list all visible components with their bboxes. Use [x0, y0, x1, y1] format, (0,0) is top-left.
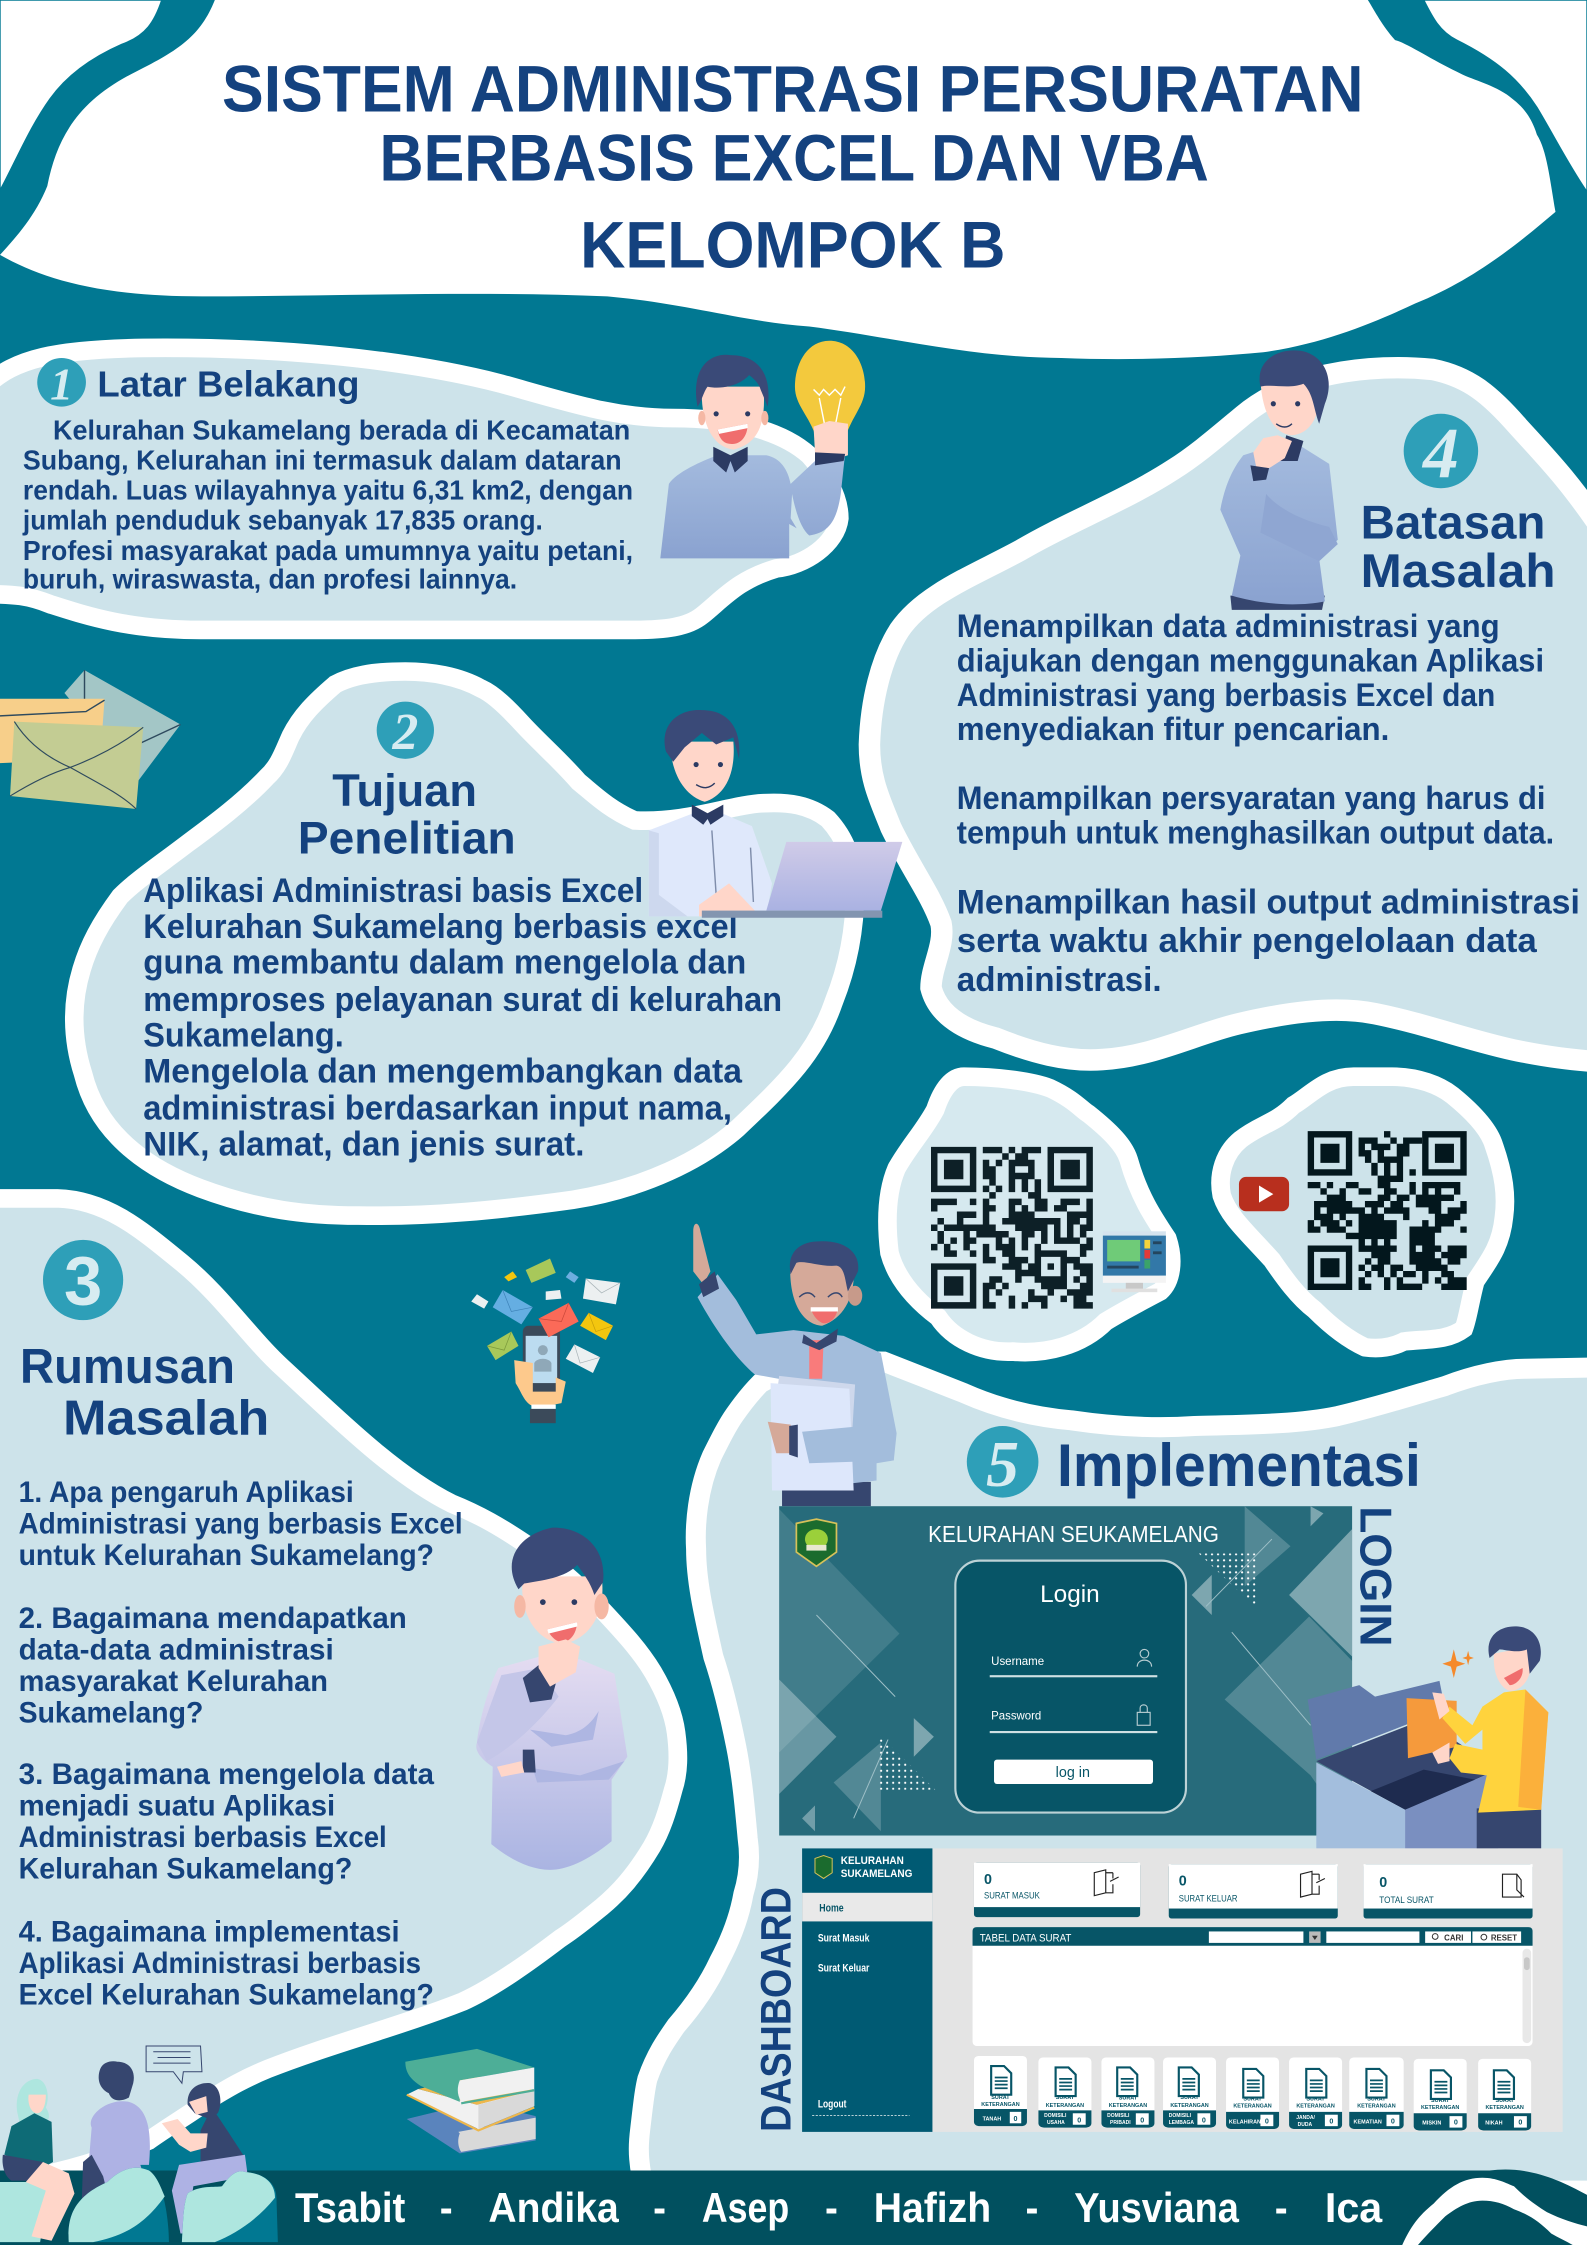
letter card: miskin: [1414, 2059, 1467, 2130]
body text: buruh, wiraswasta, dan profesi lainnya.: [23, 563, 517, 594]
sidebar: Surat Keluar: [818, 1963, 870, 1975]
body text: rendah. Luas wilayahnya yaitu 6,31 km2, dengan: [23, 475, 633, 506]
body text: Sukamelang.: [143, 1017, 344, 1055]
body text: guna membantu dalam mengelola dan: [143, 944, 746, 982]
body text: Subang, Kelurahan ini termasuk dalam dataran: [23, 445, 622, 476]
team names: Hafizh: [874, 2184, 991, 2231]
illustration: man with raised hand and papers: [693, 1224, 897, 1506]
table panel: CARI: [1444, 1934, 1463, 1943]
curly person: [82, 2061, 150, 2205]
login button: log in: [1056, 1765, 1090, 1781]
stat card: surat keluar: SURAT KELUAR: [1179, 1893, 1238, 1903]
team names: -: [653, 2184, 666, 2231]
footer bar: [0, 2169, 1587, 2245]
letter card: nikah: SURAT: [1495, 2098, 1514, 2104]
letter card: nikah: KETERANGAN: [1485, 2105, 1524, 2111]
letter card: janda duda: SURAT: [1306, 2096, 1325, 2102]
panel: batasan masalah: [869, 368, 1587, 1062]
icon: user: [1137, 1649, 1152, 1667]
body text: [143, 872, 782, 1163]
question list: 2. Bagaimana mendapatkan: [19, 1602, 407, 1635]
woman with green hair: [3, 2079, 74, 2241]
question list: 3. Bagaimana mengelola data: [19, 1758, 434, 1791]
letter card: domisili usaha: 0: [1077, 2117, 1081, 2125]
body text: Menampilkan persyaratan yang harus di: [957, 780, 1545, 816]
illustration: thinking man with open mouth: [476, 1528, 627, 1870]
number badge 3: 3: [64, 1242, 102, 1319]
letter card: domisili pribadi: KETERANGAN: [1109, 2103, 1147, 2109]
letter card: tanah: SURAT: [991, 2095, 1010, 2101]
panel: qr website: [887, 1077, 1171, 1352]
decoration: top left corner: [0, 0, 162, 190]
illustration: books: [405, 2049, 536, 2153]
number badge 3: [43, 1240, 123, 1320]
login site title: KELURAHAN SEUKAMELANG: [928, 1521, 1219, 1547]
team names: Tsabit: [295, 2184, 405, 2231]
letter card: kelahiran: 0: [1265, 2117, 1269, 2125]
number badge 5: [967, 1426, 1038, 1501]
seat right: [182, 2171, 278, 2242]
illustration: man with light bulb: [660, 341, 865, 558]
login button: [994, 1760, 1153, 1784]
sidebar: KELURAHAN: [841, 1855, 904, 1867]
letter card: tanah: TANAH: [983, 2116, 1001, 2122]
question list: [19, 1476, 463, 2011]
number badge 2: 2: [391, 704, 418, 761]
body text: Profesi masyarakat pada umumnya yaitu petani,: [23, 535, 633, 566]
table panel: [973, 1927, 1533, 2046]
team names: Andika: [488, 2184, 620, 2231]
vertical label: login: LOGIN: [1351, 1506, 1400, 1647]
title: [222, 52, 1364, 282]
letter card: tanah: [974, 2056, 1027, 2126]
letter card: domisili pribadi: [1101, 2057, 1154, 2128]
letter card: janda duda: KETERANGAN: [1296, 2104, 1335, 2110]
body text: jumlah penduduk sebanyak 17,835 orang.: [22, 505, 543, 536]
body text: serta waktu akhir pengelolaan data: [957, 922, 1538, 960]
qr code: [931, 1147, 1093, 1309]
illustration: thinking man: [1220, 350, 1338, 610]
letter card: miskin: MISKIN: [1422, 2121, 1441, 2127]
body text: [22, 415, 633, 594]
letter card: domisili usaha: KETERANGAN: [1046, 2103, 1084, 2109]
title: SISTEM ADMINISTRASI PERSURATAN: [222, 52, 1364, 126]
stat card: surat masuk: [974, 1863, 1140, 1917]
team names: Asep: [702, 2184, 789, 2231]
team names: -: [1026, 2184, 1038, 2231]
stat card: total surat: 0: [1379, 1875, 1387, 1891]
letter card: domisili lembaga: KETERANGAN: [1170, 2103, 1209, 2109]
body text: Administrasi yang berbasis Excel dan: [957, 677, 1495, 713]
stat card: surat keluar: [1169, 1864, 1338, 1919]
letter card: kelahiran: KELAHIRAN: [1229, 2119, 1261, 2125]
letter card: kelahiran: KETERANGAN: [1233, 2104, 1272, 2110]
sidebar: Logout: [818, 2099, 847, 2111]
number badge 4: 4: [1421, 414, 1459, 493]
letter card: tanah: KETERANGAN: [981, 2102, 1020, 2108]
number badge 4: [1404, 414, 1478, 493]
question list: Administrasi berbasis Excel: [19, 1821, 387, 1854]
woman talking: [162, 2083, 248, 2234]
body text: Kelurahan Sukamelang berbasis excel: [143, 908, 738, 946]
letter card: domisili pribadi: SURAT: [1119, 2096, 1138, 2102]
title banner: [0, 0, 1555, 359]
letter card: domisili lembaga: SURAT: [1180, 2095, 1199, 2101]
letter card: domisili pribadi: PRIBADI: [1110, 2120, 1131, 2126]
heading: [20, 1340, 269, 1446]
letter card: janda duda: JANDA/: [1296, 2115, 1315, 2121]
stat card: surat masuk: SURAT MASUK: [984, 1891, 1041, 1901]
sidebar: SUKAMELANG: [841, 1868, 912, 1880]
letter card: domisili pribadi: 0: [1140, 2117, 1144, 2125]
number badge 5: 5: [986, 1428, 1019, 1501]
body text: NIK, alamat, dan jenis surat.: [143, 1125, 584, 1163]
body text: administrasi berdasarkan input nama,: [143, 1090, 732, 1128]
heading: Tujuan: [332, 765, 477, 816]
letter card: nikah: NIKAH: [1485, 2121, 1503, 2127]
letter card: kelahiran: SURAT: [1243, 2096, 1262, 2102]
body text: Aplikasi Administrasi basis Excel: [143, 872, 643, 910]
sidebar: [802, 1848, 932, 2132]
letter card: domisili pribadi: DOMISILI: [1107, 2113, 1130, 2119]
table panel: TABEL DATA SURAT: [980, 1932, 1071, 1944]
letter card: nikah: 0: [1518, 2119, 1522, 2127]
question list: Administrasi yang berbasis Excel: [19, 1507, 463, 1540]
heading: Latar Belakang: [97, 365, 360, 405]
letter card: domisili usaha: DOMISILI: [1044, 2113, 1067, 2119]
body text: diajukan dengan menggunakan Aplikasi: [957, 643, 1544, 678]
letter card: janda duda: 0: [1329, 2117, 1333, 2125]
sidebar: Surat Masuk: [818, 1932, 869, 1944]
title: BERBASIS EXCEL DAN VBA: [380, 120, 1209, 194]
heading: [298, 765, 516, 863]
question list: Sukamelang?: [19, 1696, 203, 1729]
login emblem: [796, 1519, 836, 1566]
letter card: kematian: 0: [1391, 2117, 1395, 2125]
number badge 2: [377, 702, 434, 761]
letter card: nikah: [1478, 2059, 1531, 2130]
screenshot: login page: [779, 1506, 1352, 1836]
question list: masyarakat Kelurahan: [19, 1665, 328, 1698]
body text: Kelurahan Sukamelang berada di Kecamatan: [53, 415, 630, 446]
heading: Masalah: [1361, 545, 1555, 598]
letter card: kematian: KETERANGAN: [1357, 2104, 1396, 2110]
letter card: miskin: KETERANGAN: [1421, 2105, 1459, 2111]
illustration: people in discussion: [0, 2046, 278, 2242]
team names: -: [440, 2184, 453, 2231]
illustration: envelopes: [0, 670, 180, 809]
screenshot: dashboard: [802, 1848, 1563, 2132]
number badge 1: 1: [50, 358, 73, 409]
body text: administrasi.: [957, 961, 1162, 999]
question list: data-data administrasi: [19, 1633, 334, 1666]
team names: [295, 2184, 1383, 2231]
login card: Username: [991, 1654, 1044, 1668]
title: KELOMPOK B: [580, 208, 1005, 282]
login background shapes: [779, 1506, 1352, 1836]
panel: qr youtube: [1221, 1077, 1505, 1348]
panel: rumusan masalah: [0, 1198, 678, 2183]
team names: -: [1275, 2184, 1288, 2231]
login card: Password: [991, 1709, 1041, 1723]
letter card: domisili usaha: [1038, 2057, 1091, 2128]
number badge 1: [37, 358, 86, 409]
vertical label: dashboard: DASHBOARD: [753, 1887, 801, 2132]
illustration: man filing documents: [1308, 1626, 1548, 1848]
letter card: tanah: 0: [1014, 2115, 1018, 2123]
team names: -: [825, 2184, 838, 2231]
illustration: phone with flying letters: [471, 1259, 620, 1423]
stat card: surat masuk: 0: [984, 1872, 992, 1888]
stat card: total surat: TOTAL SURAT: [1379, 1895, 1434, 1905]
question list: 1. Apa pengaruh Aplikasi: [19, 1476, 354, 1509]
seat left: [0, 2182, 50, 2242]
body text: Mengelola dan mengembangkan data: [143, 1052, 743, 1090]
stat card: surat keluar: 0: [1179, 1874, 1187, 1890]
team names: Ica: [1325, 2184, 1383, 2231]
heading: [1361, 496, 1555, 598]
table panel: RESET: [1491, 1934, 1517, 1943]
panel: implementasi: [639, 1360, 1587, 2191]
icon: lock: [1137, 1705, 1150, 1725]
icon: computer: [1103, 1231, 1166, 1292]
speech bubble: [146, 2046, 202, 2083]
heading: Batasan: [1361, 496, 1545, 549]
body text: tempuh untuk menghasilkan output data.: [957, 814, 1554, 850]
question list: untuk Kelurahan Sukamelang?: [19, 1539, 434, 1572]
illustration: man with laptop: [649, 710, 902, 918]
heading: Implementasi: [1057, 1432, 1421, 1499]
footer wave: [1402, 2178, 1587, 2245]
stat card: total surat: [1364, 1864, 1533, 1919]
body text: [957, 608, 1580, 999]
letter card: kematian: [1349, 2057, 1404, 2129]
letter card: domisili usaha: USAHA: [1047, 2120, 1065, 2126]
heading: Masalah: [63, 1392, 269, 1446]
letter card: janda duda: DUDA: [1298, 2122, 1313, 2128]
icon: youtube: [1239, 1177, 1289, 1211]
question list: Aplikasi Administrasi berbasis: [19, 1947, 421, 1980]
letter card: domisili usaha: SURAT: [1056, 2095, 1075, 2101]
question list: menjadi suatu Aplikasi: [19, 1789, 335, 1822]
letter card: janda duda: [1289, 2057, 1342, 2129]
decoration: top right corner: [1424, 0, 1587, 192]
panel: tujuan penelitian: [74, 671, 855, 1216]
letter card: kelahiran: [1226, 2057, 1279, 2129]
question list: Kelurahan Sukamelang?: [19, 1852, 352, 1885]
letter card: miskin: 0: [1454, 2119, 1458, 2127]
heading: Rumusan: [20, 1340, 235, 1394]
question list: 4. Bagaimana implementasi: [19, 1915, 400, 1948]
login card: Login: [1040, 1581, 1100, 1608]
body text: Menampilkan data administrasi yang: [957, 608, 1500, 644]
letter card: domisili lembaga: LEMBAGA: [1169, 2120, 1194, 2126]
letter card: miskin: SURAT: [1431, 2098, 1450, 2104]
heading: Penelitian: [298, 812, 516, 863]
seat middle: [69, 2168, 169, 2242]
team names: Yusviana: [1074, 2184, 1240, 2231]
sidebar: Home: [819, 1902, 844, 1914]
letter card: domisili lembaga: 0: [1202, 2117, 1206, 2125]
qr code: [1308, 1131, 1467, 1290]
letter card: kematian: KEMATIAN: [1354, 2119, 1382, 2125]
login card: [955, 1561, 1186, 1813]
body text: Menampilkan hasil output administrasi: [957, 883, 1580, 921]
question list: Excel Kelurahan Sukamelang?: [19, 1978, 434, 2011]
letter card: domisili lembaga: DOMISILI: [1169, 2113, 1192, 2119]
panel: latar belakang: [0, 348, 839, 630]
letter card: domisili lembaga: [1163, 2057, 1216, 2128]
letter card: kematian: SURAT: [1367, 2096, 1386, 2102]
body text: memproses pelayanan surat di kelurahan: [143, 981, 782, 1019]
body text: menyediakan fitur pencarian.: [957, 711, 1389, 747]
